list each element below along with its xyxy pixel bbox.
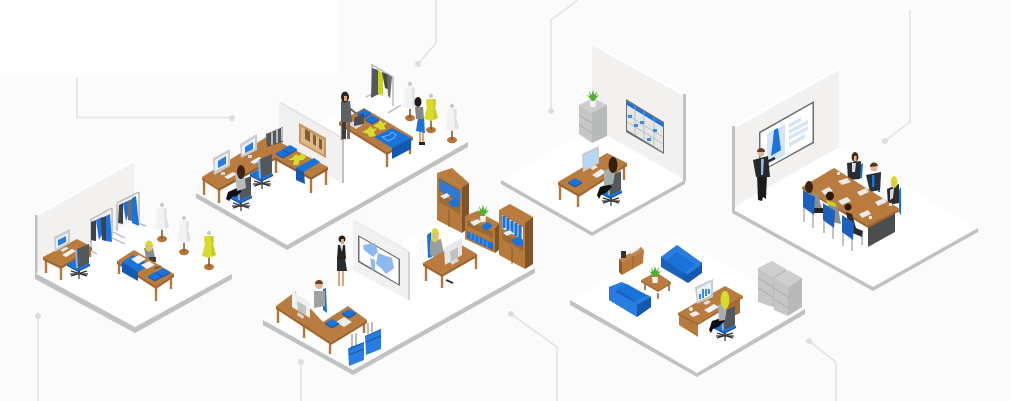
room: lounge and reception — [570, 237, 805, 377]
floor platform — [732, 147, 978, 291]
plant — [587, 90, 599, 107]
yellow patterns and folders — [357, 109, 387, 137]
cork board — [299, 123, 326, 158]
desk — [558, 153, 627, 207]
floor platform — [196, 90, 468, 250]
file cabinet — [774, 270, 802, 316]
standing woman on phone — [337, 236, 347, 286]
fabric and papers on table — [122, 255, 170, 282]
sofa — [661, 245, 702, 283]
L desk — [202, 136, 328, 203]
seated blonde woman — [427, 228, 444, 258]
papers and cups on table — [821, 172, 892, 219]
laptop — [348, 113, 364, 129]
mannequin yellow — [202, 231, 216, 270]
white header block — [0, 0, 338, 75]
monitor right — [240, 134, 257, 158]
partition wall — [279, 102, 344, 183]
sofa — [609, 282, 651, 317]
seated man — [306, 280, 327, 328]
desk — [423, 243, 477, 288]
room: design office upper — [196, 64, 468, 250]
upper table — [339, 108, 413, 167]
attendee far side — [847, 152, 863, 180]
attendee and chair near side — [803, 181, 823, 228]
clothes rack — [113, 192, 146, 238]
room: planning office — [501, 43, 686, 236]
attendee and chair near side — [842, 204, 863, 251]
coffee table — [641, 272, 671, 299]
mannequin white — [155, 203, 169, 242]
attendee far side — [866, 162, 881, 192]
seated woman — [226, 165, 246, 201]
floor platform — [570, 237, 805, 377]
monitor — [54, 229, 70, 252]
meeting table — [802, 168, 900, 247]
standing woman with laptop — [341, 92, 356, 139]
back wall — [35, 159, 134, 273]
keyboard — [62, 249, 76, 257]
keyboards — [224, 157, 263, 179]
clothes rack — [366, 64, 401, 113]
low cabinet — [465, 211, 499, 253]
monitor — [444, 238, 462, 283]
L desk — [276, 292, 367, 354]
keyboard and folder — [568, 169, 606, 188]
seated blonde woman — [709, 291, 730, 333]
attendee far side — [887, 176, 901, 215]
mannequin white — [177, 216, 191, 255]
presenter — [753, 148, 775, 201]
room: sales and logistics — [263, 168, 535, 375]
suitcase — [365, 322, 381, 355]
monitor left — [213, 149, 230, 175]
executive desk — [678, 286, 743, 337]
back wall — [732, 67, 839, 210]
mannequin white — [403, 82, 417, 121]
wall calendar — [626, 99, 664, 154]
chair — [67, 244, 90, 279]
floor platform — [263, 218, 535, 375]
chair — [250, 154, 273, 189]
room: meeting room — [732, 67, 978, 291]
tailor woman blue skirt — [414, 97, 425, 145]
plant — [649, 266, 661, 283]
mannequin yellow — [424, 94, 438, 133]
plant — [477, 205, 489, 222]
attendee and chair near side — [823, 192, 841, 239]
floor platform — [35, 220, 232, 333]
desk — [43, 239, 92, 280]
seated woman — [597, 157, 618, 199]
mannequin white — [445, 104, 459, 143]
chair — [713, 306, 736, 341]
desk accessories — [689, 304, 719, 317]
monitor — [582, 146, 599, 172]
blue fabric on table — [374, 128, 411, 159]
monitor and papers — [292, 291, 356, 328]
binders — [266, 127, 283, 147]
bookcase right — [499, 204, 533, 269]
suitcase — [348, 333, 364, 366]
sideboard — [619, 247, 644, 275]
room: pattern workshop left — [35, 159, 232, 333]
map board — [353, 220, 410, 300]
floor platform — [501, 127, 685, 236]
chair — [229, 176, 252, 211]
seated blonde tailor — [144, 240, 156, 262]
file cabinet — [758, 261, 786, 307]
bookcase left — [437, 168, 469, 233]
clothes rack — [86, 208, 125, 254]
filing cabinet — [579, 98, 607, 143]
back wall — [592, 43, 686, 181]
chair — [599, 171, 622, 206]
cutting table — [117, 250, 174, 301]
folders, shirt and cloth on desk — [276, 145, 320, 184]
monitor — [695, 279, 713, 305]
presentation screen — [759, 101, 814, 173]
